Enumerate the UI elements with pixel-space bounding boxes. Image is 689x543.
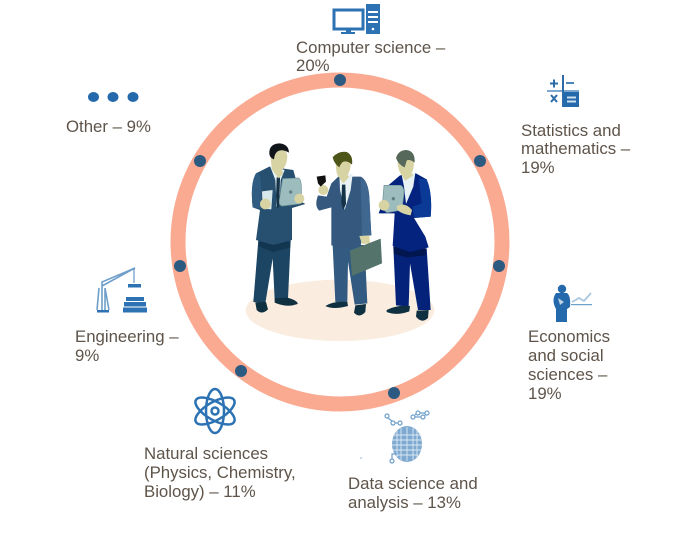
progress ring with markers [174,74,505,404]
label: engineering: 9% [75,346,99,365]
label: statistics and mathematics: Statistics and [521,121,621,140]
icon: presenter with chart [554,285,592,322]
label: economics and social sciences: Economics [528,327,610,346]
businessman right [379,150,431,321]
label: data science and analysis: Data science and [348,474,478,493]
label: economics and social sciences: sciences – [528,365,608,384]
businessman left [252,143,305,313]
label: statistics and mathematics: mathematics – [521,139,631,158]
central illustration: three businessmen [246,143,434,341]
label: computer science: 20% [296,56,330,75]
label: economics and social sciences: 19% [528,384,562,403]
label: natural sciences: Biology) – 11% [144,482,256,501]
icon: computer [334,4,380,34]
icon: brain with network [360,411,429,463]
label: natural sciences: (Physics, Chemistry, [144,463,296,482]
label: engineering: Engineering – [75,327,179,346]
label: data science and analysis: analysis – 13% [348,493,461,512]
businessman middle [316,152,382,316]
icon: three dots [88,92,138,102]
icon: atom [191,389,239,433]
icon: math operators [547,75,579,107]
label: computer science: Computer science – [296,38,446,57]
label: other: Other – 9% [66,117,151,136]
label: economics and social sciences: and social [528,346,604,365]
label: natural sciences: Natural sciences [144,444,268,463]
floor ellipse [246,280,434,341]
label: statistics and mathematics: 19% [521,158,555,177]
icon: crane and stacked blocks [97,268,147,312]
